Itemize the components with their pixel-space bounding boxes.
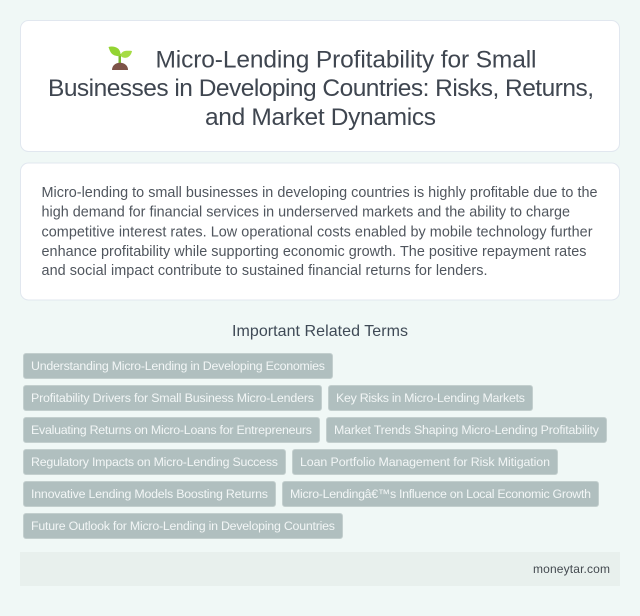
summary text: enhance profitability while supporting economic growth. The positive repayment rates — [42, 244, 586, 260]
chip: profitability drivers — [24, 386, 322, 410]
heading: related terms: Important Related Terms — [232, 323, 408, 340]
panel: title — [20, 20, 620, 152]
chip: loan portfolio — [292, 450, 558, 474]
chip: loan portfolio: Loan Portfolio Management for Risk Mitigation — [300, 455, 550, 469]
chip: future outlook — [24, 514, 342, 538]
chip: regulatory impacts: Regulatory Impacts on Micro-Lending Success — [31, 455, 278, 469]
summary text: competitive interest rates. Low operational costs enabled by mobile technology further — [42, 224, 593, 240]
footer: moneytar.com — [533, 562, 610, 576]
chip: understanding — [24, 354, 332, 378]
chip: key risks: Key Risks in Micro-Lending Markets — [336, 391, 525, 405]
chip: market trends: Market Trends Shaping Micro-Lending Profitability — [334, 423, 600, 437]
chip: future outlook: Future Outlook for Micro-Lending in Developing Countries — [31, 519, 335, 533]
icon: sprout — [108, 46, 132, 70]
chip: innovative models: Innovative Lending Models Boosting Returns — [31, 487, 268, 501]
summary text: Micro-lending to small businesses in developing countries is highly profitable due to the — [42, 185, 598, 201]
panel: summary — [20, 163, 620, 300]
chip: evaluating returns: Evaluating Returns on Micro-Loans for Entrepreneurs — [31, 423, 312, 437]
chip: market trends — [326, 418, 606, 442]
title text: and Market Dynamics — [205, 104, 436, 131]
title text: Businesses in Developing Countries: Risks, Returns, — [48, 75, 594, 102]
title text: Micro-Lending Profitability for Small — [156, 46, 536, 74]
summary text: high demand for financial services in underserved markets and the ability to charge — [42, 204, 570, 220]
summary text — [42, 185, 598, 279]
title text — [48, 46, 594, 131]
summary text: and social impact contribute to sustained financial returns for lenders. — [42, 263, 488, 279]
chip: understanding: Understanding Micro-Lending in Developing Economies — [31, 359, 325, 373]
chip: key risks — [328, 386, 532, 410]
chip: evaluating returns — [24, 418, 320, 442]
chip: profitability drivers: Profitability Drivers for Small Business Micro-Lenders — [31, 391, 314, 405]
chip: innovative models — [24, 482, 276, 506]
chip: local growth — [282, 482, 598, 506]
chip: local growth: Micro-Lendingâ€™s Influence on Local Economic Growth — [290, 487, 591, 501]
panel: term chips — [24, 354, 606, 538]
chip: regulatory impacts — [24, 450, 286, 474]
footer — [20, 552, 620, 586]
